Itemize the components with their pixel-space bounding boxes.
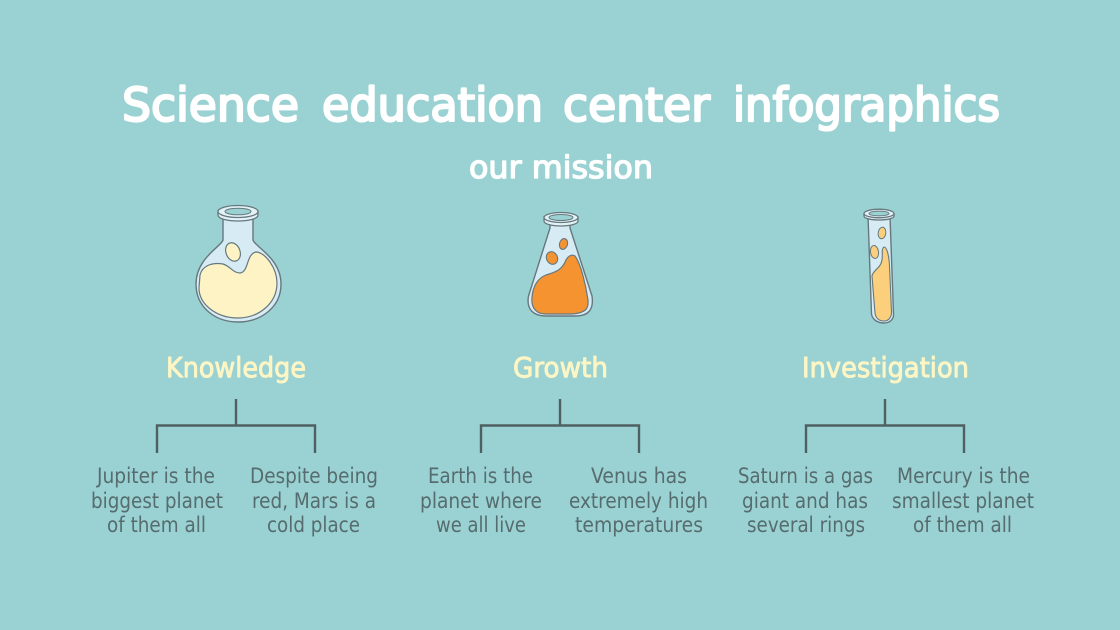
text: jupiter: Jupiter is the — [95, 464, 215, 488]
connector: investigation — [806, 399, 964, 453]
text: earth: we all live — [436, 513, 526, 537]
subtitle: our mission — [469, 150, 653, 186]
text: saturn: giant and has — [742, 489, 868, 513]
text: mars: Despite being — [250, 464, 378, 488]
icon: test tube — [864, 209, 894, 323]
connector: growth — [481, 399, 639, 453]
text: mars: red, Mars is a — [252, 489, 376, 513]
icon: conical flask — [528, 212, 592, 316]
heading: investigation: Investigation — [802, 351, 969, 384]
text: mercury: Mercury is the — [897, 464, 1030, 488]
title: infographics — [733, 78, 1000, 132]
text: mercury: smallest planet — [892, 489, 1034, 513]
title: Science — [122, 78, 299, 132]
text: earth: planet where — [420, 489, 542, 513]
title: center — [563, 78, 710, 132]
text: jupiter: biggest planet — [91, 489, 223, 513]
icon: round flask — [196, 206, 281, 322]
connector: knowledge — [157, 399, 315, 453]
heading: knowledge: Knowledge — [166, 351, 306, 384]
text: venus: temperatures — [575, 513, 703, 537]
text: jupiter: of them all — [107, 513, 206, 537]
text: venus: Venus has — [591, 464, 687, 488]
text: venus: extremely high — [569, 489, 708, 513]
heading: growth: Growth — [513, 351, 608, 384]
title — [122, 78, 1000, 132]
text: mercury: of them all — [913, 513, 1012, 537]
text: saturn: several rings — [747, 513, 865, 537]
title: education — [322, 78, 543, 132]
text: earth: Earth is the — [428, 464, 533, 488]
text: mars: cold place — [267, 513, 360, 537]
text: saturn: Saturn is a gas — [738, 464, 873, 488]
